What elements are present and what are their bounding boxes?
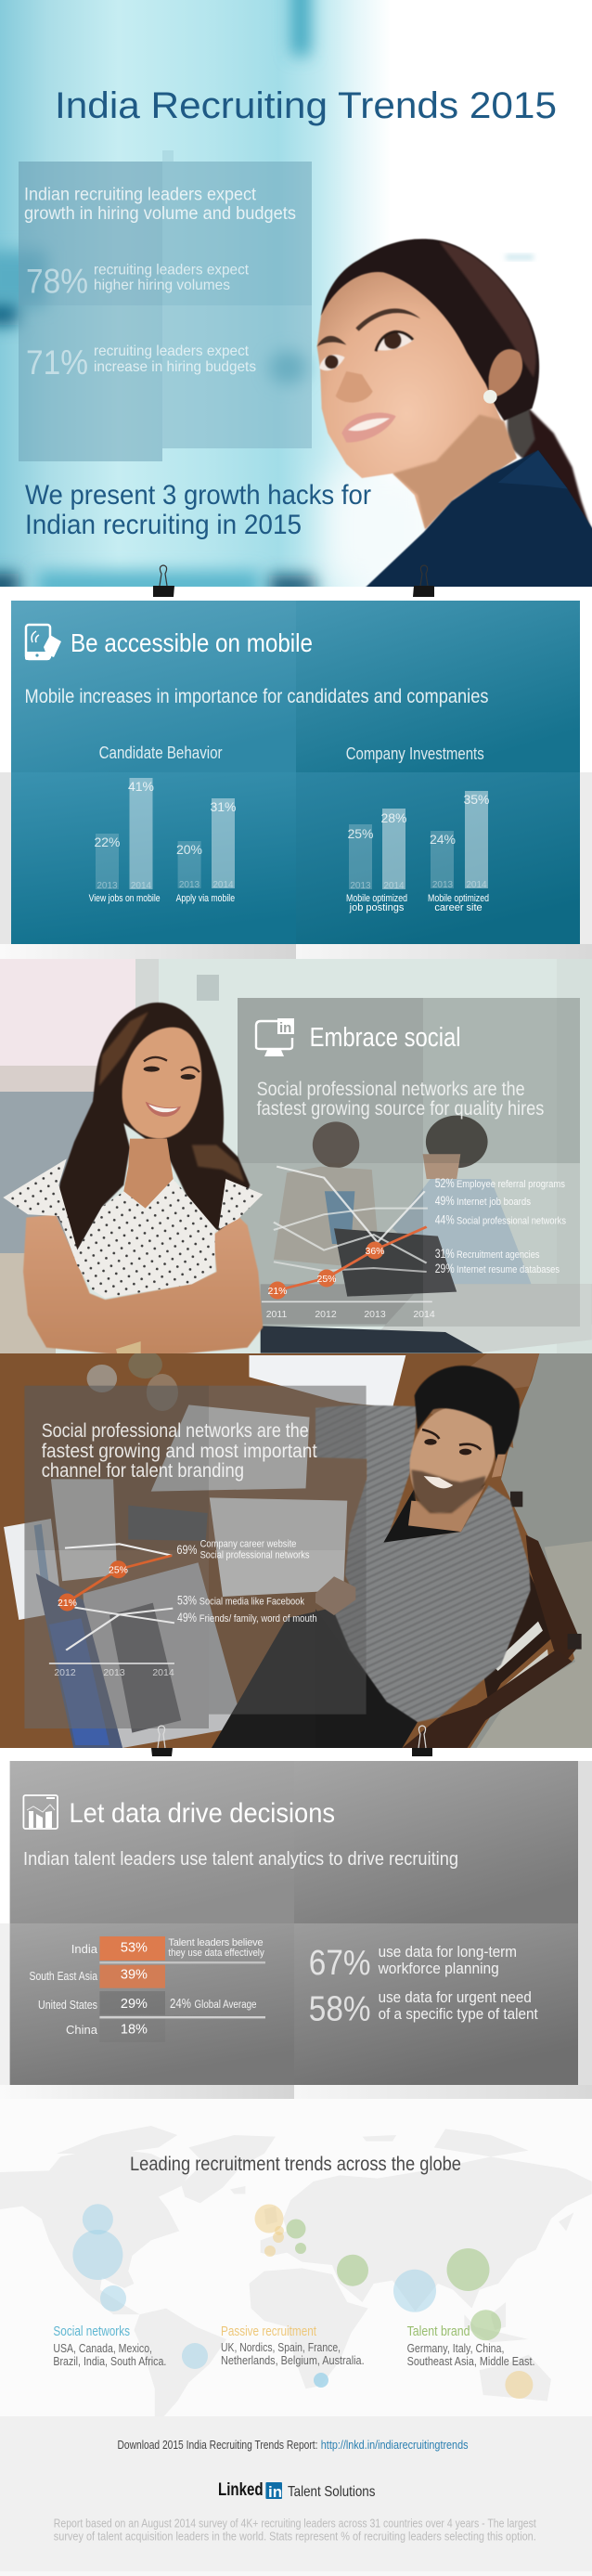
bar chart: company investments: Mobile optimized [428,893,489,904]
bar chart: company investments [346,744,490,913]
line chart: talent branding channels: Social professional networks [200,1550,310,1561]
download link line: Download 2015 India Recruiting Trends Report: [117,2439,317,2452]
data effectiveness table: they use data effectively [168,1948,264,1959]
legend: passive recruitment: Passive recruitment [221,2324,316,2339]
subheading: fastest growing source for quality hires [257,1098,544,1120]
panel: embrace social backing [238,998,580,1327]
world map section [0,2099,592,2418]
footer [0,2416,592,2576]
bar chart: candidate behavior: 2014 [212,880,234,890]
line chart: talent branding channels: 49% [177,1611,197,1625]
growth hacks statement [25,480,371,540]
world map land masses [0,2126,592,2418]
bar chart: company investments: 35% [463,792,490,807]
background shading around data panel [0,1748,592,2119]
page background shading around mobile panel [0,587,592,959]
subheading: fastest growing and most important [42,1441,317,1462]
stat: 67%: 67% [309,1944,371,1983]
panel: talent branding content [42,1420,317,1678]
legend: social networks: Brazil, India, South Africa. [53,2354,166,2368]
bar chart: company investments: 28% [380,810,407,825]
woman figure [3,1003,263,1355]
bar chart: company investments: 2014 [466,880,487,890]
data effectiveness table: 53% [121,1941,148,1956]
panel: let data drive decisions [10,1761,578,2085]
desk items [4,1351,405,1748]
heading: Embrace social [310,1023,461,1053]
logo: LinkedIn Talent Solutions: Talent Solutions [288,2484,375,2500]
stat: 58%: 58% [309,1990,371,2029]
line chart: talent branding channels: 2013 [103,1667,125,1678]
stat: 67% [309,1943,517,1983]
stat: 71%: recruiting leaders expect [94,343,250,359]
hero intro text [24,186,296,224]
line chart: quality hire sources: Employee referral programs [457,1179,565,1190]
line chart: quality hire sources: 29% [435,1262,455,1275]
stat: 58% [309,1988,538,2029]
bubbles: passive recruitment [254,2204,533,2399]
line chart: quality hire sources: Internet job boards [457,1197,531,1208]
subheading [42,1420,317,1482]
bar chart: company investments: Mobile optimized [346,893,407,904]
line chart: talent branding channels: 25% [109,1565,128,1576]
line chart: quality hire sources: 44% [435,1213,455,1227]
line chart: talent branding channels: Friends/ family, word of mouth [199,1613,317,1625]
methodology note [54,2517,536,2544]
legend: social networks [53,2324,166,2368]
download link line: http://lnkd.in/indiarecruitingtrends [321,2439,468,2452]
stat: 71% [26,343,256,382]
data effectiveness table: 24% [170,1997,191,2012]
stat: 71%: increase in hiring budgets [94,359,256,375]
logo: LinkedIn Talent Solutions [218,2480,375,2501]
growth hacks statement: We present 3 growth hacks for [25,480,371,511]
data effectiveness table: 39% [121,1968,148,1983]
data effectiveness table: India [71,1942,98,1956]
hero woman photo [317,239,592,588]
bar chart: candidate behavior: 2013 [179,880,200,890]
line chart: talent branding channels: 69% [176,1543,197,1557]
legend: passive recruitment: UK, Nordics, Spain, France, [221,2340,341,2354]
line chart: talent branding channels: Social media like Facebook [199,1597,304,1608]
icon: monitor with in badge: in [279,1020,291,1036]
line chart: talent branding channels: Company career website [200,1539,296,1550]
data effectiveness table: South East Asia [30,1969,98,1983]
icon: analytics window [23,1795,58,1829]
line chart: talent branding channels: 2012 [54,1667,76,1678]
stat: 67%: workforce planning [378,1960,499,1977]
hero intro text: Indian recruiting leaders expect [24,186,257,204]
line chart: quality hire sources: 2013 [364,1309,386,1320]
panel: be accessible on mobile [11,601,580,944]
bar chart: company investments: Company Investments [346,744,484,763]
panel: embrace social content [256,1018,566,1320]
data effectiveness table: 18% [121,2023,148,2038]
icon: phone with tapping hand [25,625,61,660]
line chart: talent branding channels: 2014 [152,1667,174,1678]
data effectiveness table: 29% [121,1997,148,2012]
photo: smiling woman in office [0,959,592,1355]
legend: social networks: Social networks [53,2324,130,2339]
hero section background [0,0,535,587]
data effectiveness table: China [66,2023,98,2037]
bar chart: company investments: 2013 [432,880,454,890]
binder clips: bottom of photo [151,1726,432,1756]
line chart: talent branding channels [49,1539,317,1678]
line chart: quality hire sources [262,1167,566,1320]
data effectiveness table: Talent leaders believe [168,1937,264,1948]
bar chart: candidate behavior: 20% [176,842,202,857]
line chart: quality hire sources: 21% [267,1286,288,1297]
subheading: Social professional networks are the [42,1420,309,1442]
subheading: Indian talent leaders use talent analytics to drive recruiting [23,1848,458,1870]
stat: 67%: use data for long-term [379,1943,517,1961]
legend: talent brand: Southeast Asia, Middle East. [407,2354,534,2368]
stat: 78%: recruiting leaders expect [94,262,250,278]
stat: 78% [26,262,250,301]
map heading: Leading recruitment trends across the globe [130,2154,461,2175]
heading: Let data drive decisions [69,1798,335,1829]
line chart: quality hire sources: 2011 [266,1309,287,1320]
data effectiveness table [30,1936,265,2042]
legend: talent brand: Talent brand [407,2324,470,2339]
download link line [117,2439,468,2452]
stat: 58%: use data for urgent need [379,1988,532,2006]
line chart: quality hire sources: 52% [435,1176,455,1190]
bar chart: candidate behavior: 41% [128,779,154,794]
line chart: talent branding channels: 53% [177,1594,197,1608]
stat: 78%: higher hiring volumes [94,278,230,293]
hero intro text: growth in hiring volume and budgets [24,204,296,224]
bar chart: candidate behavior: 22% [94,835,121,849]
title: India Recruiting Trends 2015 [55,85,557,126]
line chart: quality hire sources: Recruitment agencies [457,1249,540,1261]
panel: talent branding backing [24,1386,367,1728]
stat: 58%: of a specific type of talent [379,2005,538,2023]
hero translucent panel [19,150,312,461]
subheading [257,1079,544,1120]
growth hacks statement: Indian recruiting in 2015 [25,510,302,540]
subheading: Social professional networks are the [257,1079,525,1100]
legend: talent brand [407,2324,534,2368]
photo: meeting behind the panel [261,1116,592,1353]
stat: 78%: 78% [26,262,88,301]
line chart: quality hire sources: 2014 [413,1309,435,1320]
bar chart: candidate behavior: Apply via mobile [176,893,235,904]
heading: Be accessible on mobile [71,628,313,657]
line chart: quality hire sources: Internet resume databases [457,1264,560,1275]
legend: passive recruitment: Netherlands, Belgium, Australia. [221,2353,365,2367]
binder clips: top [153,565,434,597]
photo: man at desk from above [0,1351,592,1748]
bar chart: company investments: 25% [347,826,374,841]
legend: passive recruitment [221,2324,365,2367]
bar chart: candidate behavior: 2014 [131,881,152,891]
icon: monitor with in badge [256,1018,294,1056]
bubbles: social networks [72,2204,436,2388]
bar chart: candidate behavior [89,744,237,904]
line chart: quality hire sources: 2012 [315,1309,337,1320]
legend: social networks: USA, Canada, Mexico, [53,2341,152,2355]
line chart: quality hire sources: 25% [316,1274,337,1285]
logo: LinkedIn Talent Solutions: in [268,2483,282,2501]
bubbles: talent brand [286,2219,501,2340]
bar chart: candidate behavior: View jobs on mobile [89,893,161,904]
subheading: Mobile increases in importance for candidates and companies [24,686,488,707]
line chart: quality hire sources: Social professional networks [457,1216,566,1227]
data effectiveness table: Global Average [195,2000,256,2011]
bar chart: company investments: job postings [349,902,405,913]
logo: LinkedIn Talent Solutions: Linked [218,2480,264,2500]
bar chart: company investments: career site [434,902,483,913]
man figure [315,1353,592,1748]
legend: talent brand: Germany, Italy, China, [407,2341,505,2355]
stat: 71%: 71% [26,343,88,382]
bar chart: candidate behavior: 31% [210,799,237,814]
line chart: quality hire sources: 31% [435,1247,455,1261]
line chart: quality hire sources: 36% [365,1246,385,1257]
bar chart: company investments: 2013 [350,881,371,891]
bar chart: candidate behavior: 2013 [97,881,118,891]
bar chart: company investments: 24% [430,832,456,847]
bar chart: company investments: 2014 [383,881,405,891]
subheading: channel for talent branding [42,1460,244,1482]
bar chart: candidate behavior: Candidate Behavior [99,744,223,762]
line chart: talent branding channels: 21% [58,1598,77,1609]
data effectiveness table: United States [38,1998,97,2012]
line chart: quality hire sources: 49% [435,1194,455,1208]
